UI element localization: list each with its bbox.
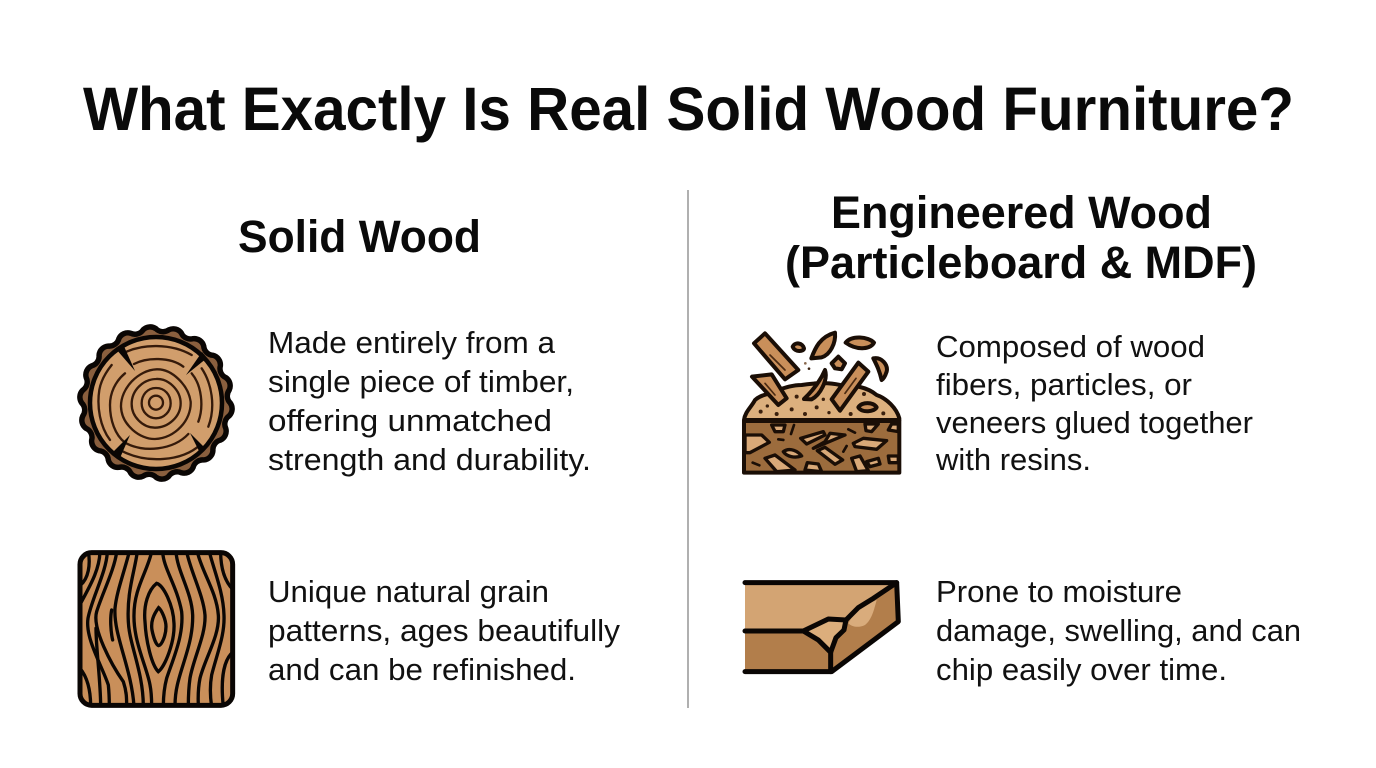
text: engineered wood point one: Composed of wood: [936, 329, 1205, 364]
text: engineered wood point one: with resins.: [935, 442, 1091, 477]
text: engineered wood point two: Prone to moisture: [936, 574, 1182, 609]
heading: engineered wood: [785, 187, 1257, 288]
text: engineered wood point two: chip easily over time.: [936, 652, 1227, 687]
text: solid wood point two: [268, 574, 621, 687]
text: solid wood point one: Made entirely from a: [268, 325, 556, 360]
title: What Exactly Is Real Solid Wood Furniture?: [83, 75, 1294, 143]
icon: log cross-section: [80, 327, 232, 479]
text: engineered wood point two: [936, 574, 1301, 687]
text: solid wood point one: offering unmatched: [268, 403, 552, 438]
heading: solid wood: Solid Wood: [238, 211, 481, 262]
text: solid wood point two: Unique natural grain: [268, 574, 549, 609]
icon: chipped board: [745, 583, 898, 672]
text: engineered wood point one: veneers glued together: [936, 405, 1253, 440]
text: solid wood point two: and can be refinished.: [268, 652, 576, 687]
text: engineered wood point one: fibers, particles, or: [936, 367, 1192, 402]
icon: wood particles pile: [744, 333, 899, 473]
panel: solid wood: [80, 211, 621, 707]
heading: engineered wood: (Particleboard & MDF): [785, 237, 1257, 288]
heading: engineered wood: Engineered Wood: [831, 187, 1212, 238]
text: solid wood point one: single piece of timber,: [268, 364, 574, 399]
text: solid wood point two: patterns, ages beautifully: [268, 613, 621, 648]
text: engineered wood point one: [935, 329, 1253, 477]
text: solid wood point one: strength and durability.: [268, 442, 591, 477]
panel divider: [687, 190, 689, 708]
icon: wood grain square: [80, 552, 233, 707]
text: solid wood point one: [268, 325, 591, 477]
panel: engineered wood: [744, 187, 1301, 687]
text: engineered wood point two: damage, swelling, and can: [936, 613, 1301, 648]
